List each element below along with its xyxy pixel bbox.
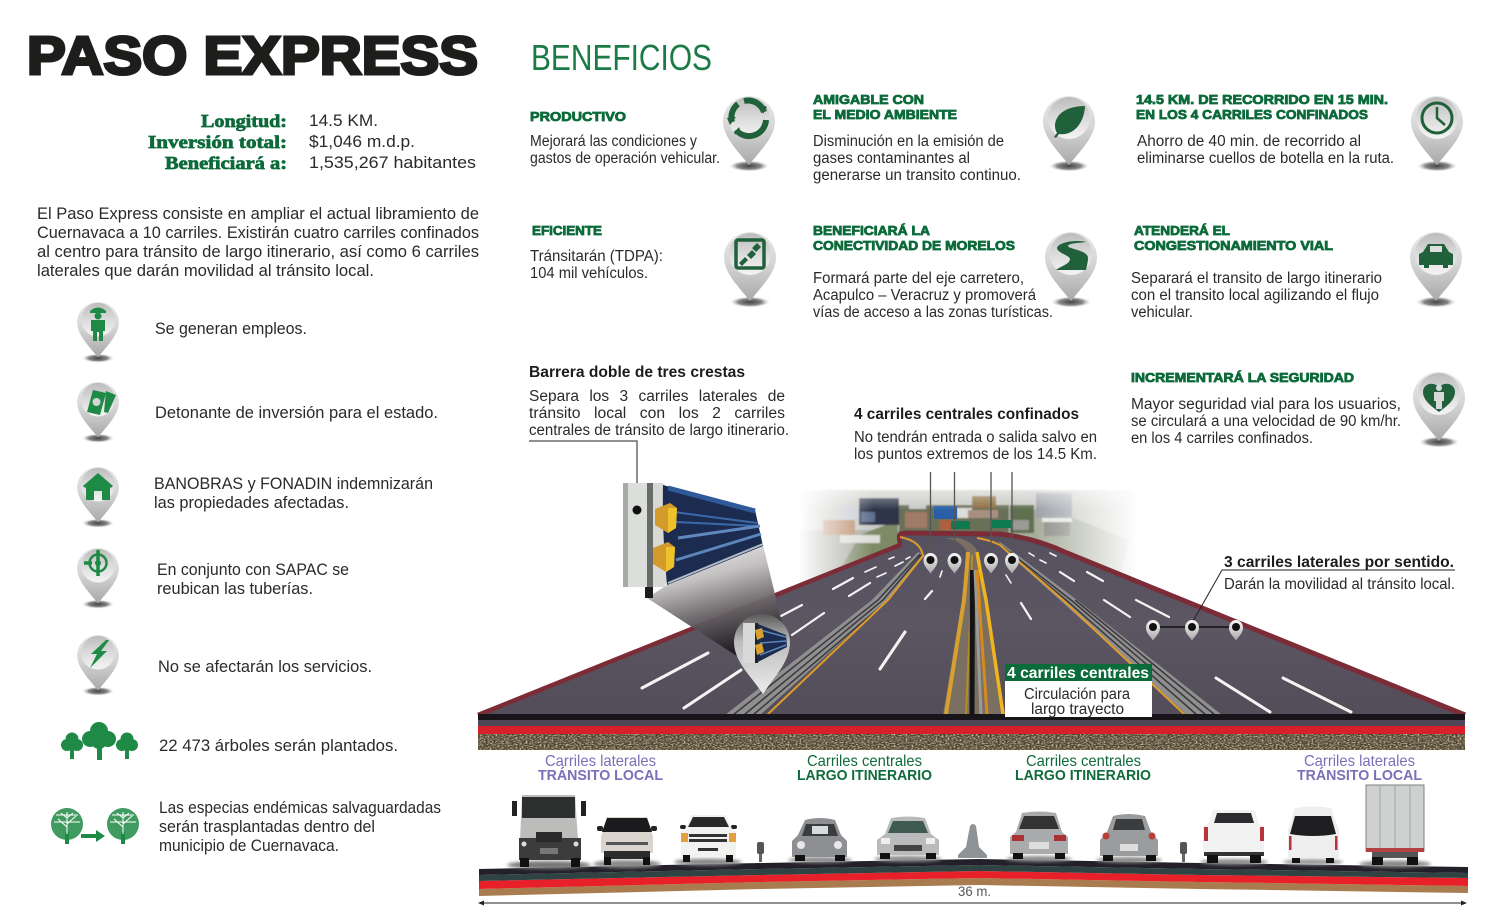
- benefit: conectividad: Acapulco – Veracruz y promoverá: [813, 287, 1036, 304]
- benefit: productivo: Mejorará las condiciones y: [530, 133, 697, 150]
- benefit: seguridad: INCREMENTARÁ LA SEGURIDAD: [1131, 370, 1354, 385]
- divider post: right: [1180, 842, 1187, 862]
- benefit: congestionamiento: vehicular.: [1131, 304, 1193, 321]
- list item: empleos: Se generan empleos.: [155, 320, 307, 338]
- intro paragraph: [37, 205, 479, 280]
- label: carriles centrales: Circulación para: [1024, 686, 1130, 703]
- benefit: recorrido: EN LOS 4 CARRILES CONFINADOS: [1136, 107, 1368, 122]
- benefit: congestionamiento: Separará el transito de largo itinerario: [1131, 270, 1382, 287]
- annotation: carriles confinados: No tendrán entrada o salida salvo en: [854, 429, 1097, 446]
- list item: tuberias: [77, 548, 349, 609]
- annotation: barrera doble: tránsito local con los 2 carriles: [529, 405, 785, 422]
- benefit: eficiente: [530, 223, 776, 308]
- benefit: congestionamiento: ATENDERÁ EL: [1134, 223, 1230, 238]
- benefit: congestionamiento: [1131, 223, 1462, 321]
- section label: laterales izquierda: Carriles laterales: [545, 753, 656, 770]
- width dimension: 36 m.: [958, 884, 991, 899]
- benefit: medio ambiente: generarse un transito continuo.: [813, 167, 1021, 184]
- section label: centrales derecha: Carriles centrales: [1026, 753, 1141, 770]
- intro paragraph: al centro para tránsito de largo itinerario, así como 6 carriles: [37, 243, 479, 261]
- section label: laterales izquierda: TRÁNSITO LOCAL: [538, 767, 663, 784]
- vehicle: compact car rear: [1096, 814, 1162, 863]
- label: carriles centrales: largo trayecto: [1031, 701, 1124, 718]
- list item: servicios: No se afectarán los servicios.: [158, 658, 372, 676]
- road perspective: [478, 533, 1465, 715]
- list item: inversion: Detonante de inversión para el estado.: [155, 404, 438, 422]
- section label: centrales derecha: LARGO ITINERARIO: [1015, 767, 1151, 784]
- benefit: medio ambiente: [813, 92, 1095, 184]
- benefit: productivo: [530, 96, 775, 172]
- pin: barrier on road: [734, 614, 790, 694]
- list item: trasplante: [51, 799, 441, 855]
- section label: laterales izquierda: [538, 753, 663, 784]
- section label: centrales izquierda: Carriles centrales: [807, 753, 922, 770]
- benefit: medio ambiente: EL MEDIO AMBIENTE: [813, 107, 957, 122]
- annotation: carriles laterales: 3 carriles laterales por sentido.: [1224, 554, 1454, 571]
- key figures: $1,046 m.d.p.: [309, 133, 415, 151]
- benefit: medio ambiente: Disminución en la emisión de: [813, 133, 1004, 150]
- benefit: conectividad: [813, 223, 1097, 321]
- key figures: Beneficiará a:: [165, 153, 287, 173]
- list item: arboles: [61, 722, 398, 760]
- list item: empleos: [77, 302, 307, 363]
- vehicle: pickup rear: [1200, 810, 1268, 865]
- benefit: recorrido: eliminarse cuellos de botella en la ruta.: [1137, 150, 1394, 167]
- intro paragraph: laterales que darán movilidad al tránsito local.: [37, 262, 374, 280]
- section label: laterales derecha: [1297, 753, 1422, 784]
- section label: centrales izquierda: LARGO ITINERARIO: [797, 767, 932, 784]
- label: carriles centrales: 4 carriles centrales: [1007, 665, 1149, 682]
- central median: [943, 538, 1005, 714]
- annotation: carriles confinados: los puntos extremos de los 14.5 Km.: [854, 446, 1097, 463]
- vehicle: van front: [593, 817, 661, 868]
- vehicle: sedan front: [874, 816, 942, 862]
- annotation: carriles confinados: [854, 406, 1097, 463]
- key figures: [148, 111, 476, 173]
- title: PASO EXPRESS: [27, 26, 478, 86]
- central barrier: [958, 824, 987, 858]
- road cross-section: [479, 859, 1468, 896]
- vehicle: compact car front: [788, 818, 852, 863]
- orange edge lines: [767, 537, 923, 715]
- annotation: barrera doble: [529, 364, 789, 439]
- list item: trasplante: Las especias endémicas salvaguardadas: [159, 799, 441, 817]
- lane dashes: [642, 553, 1351, 712]
- pins: lateral lanes: [1146, 570, 1455, 640]
- benefit: recorrido: [1136, 92, 1463, 172]
- list item: indemnizacion: las propiedades afectadas.: [154, 494, 349, 512]
- annotation: barrera doble: Separa los 3 carriles laterales de: [529, 388, 785, 405]
- annotation: barrera doble: centrales de tránsito de largo itinerario.: [529, 422, 789, 439]
- vehicle: pickup front: [674, 815, 742, 866]
- key figures: 1,535,267 habitantes: [309, 154, 476, 172]
- width dimension: [478, 884, 1467, 906]
- list item: inversion: [77, 382, 438, 443]
- section label: laterales derecha: Carriles laterales: [1304, 753, 1415, 770]
- benefit: medio ambiente: AMIGABLE CON: [813, 92, 924, 107]
- key figures: 14.5 KM.: [309, 112, 378, 130]
- vehicle: truck front: [507, 795, 591, 869]
- benefit: congestionamiento: CONGESTIONAMIENTO VIAL: [1134, 238, 1333, 253]
- annotation: carriles confinados: 4 carriles centrales confinados: [854, 406, 1079, 423]
- heading: beneficios: BENEFICIOS: [531, 37, 712, 78]
- pins: central lanes: [924, 472, 1019, 574]
- benefit: recorrido: 14.5 KM. DE RECORRIDO EN 15 MIN.: [1136, 92, 1388, 107]
- list item: trasplante: municipio de Cuernavaca.: [159, 837, 339, 855]
- list item: trasplante: serán trasplantadas dentro del: [159, 818, 375, 836]
- list item: indemnizacion: BANOBRAS y FONADIN indemnizarán: [154, 475, 433, 493]
- benefit: eficiente: EFICIENTE: [532, 223, 602, 238]
- benefit: seguridad: [1131, 370, 1465, 448]
- benefit: congestionamiento: con el transito local agilizando el flujo: [1131, 287, 1379, 304]
- section label: laterales derecha: TRÁNSITO LOCAL: [1297, 767, 1422, 784]
- list item: tuberias: reubican las tuberías.: [157, 580, 313, 598]
- benefit: medio ambiente: gases contaminantes al: [813, 150, 970, 167]
- vehicle: truck rear: [1359, 785, 1431, 868]
- benefit: productivo: PRODUCTIVO: [530, 109, 626, 124]
- city background: [798, 470, 1143, 596]
- annotation: carriles laterales: Darán la movilidad al tránsito local.: [1224, 576, 1455, 593]
- list item: indemnizacion: [77, 467, 433, 528]
- callout: barrier detail: [529, 441, 790, 694]
- benefit: seguridad: Mayor seguridad vial para los usuarios,: [1131, 396, 1401, 413]
- road cross layers: [478, 714, 1465, 750]
- benefit: seguridad: en los 4 carriles confinados.: [1131, 430, 1313, 447]
- label: carriles centrales: [1005, 664, 1152, 718]
- benefit: conectividad: Formará parte del eje carretero,: [813, 270, 1024, 287]
- benefit: conectividad: CONECTIVIDAD DE MORELOS: [813, 238, 1015, 253]
- key figures: Longitud:: [201, 111, 287, 131]
- benefit: eficiente: 104 mil vehículos.: [530, 265, 648, 282]
- vehicle: sedan rear: [1006, 812, 1072, 862]
- section label: centrales derecha: [1015, 753, 1151, 784]
- annotation: carriles laterales: [1224, 554, 1455, 593]
- key figures: Inversión total:: [148, 132, 287, 152]
- lateral barriers: [725, 552, 925, 715]
- list item: servicios: [77, 635, 372, 696]
- annotation: barrera doble: Barrera doble de tres crestas: [529, 364, 745, 381]
- intro paragraph: Cuernavaca a 10 carriles. Existirán cuatro carriles confinados: [37, 224, 479, 242]
- benefit: recorrido: Ahorro de 40 min. de recorrido al: [1137, 133, 1361, 150]
- benefit: seguridad: se circulará a una velocidad de 90 km/hr.: [1131, 413, 1401, 430]
- section label: centrales izquierda: [797, 753, 932, 784]
- intro paragraph: El Paso Express consiste en ampliar el actual libramiento de: [37, 205, 479, 223]
- vehicle: van rear: [1283, 806, 1343, 865]
- benefit: conectividad: vías de acceso a las zonas turísticas.: [813, 304, 1053, 321]
- list item: tuberias: En conjunto con SAPAC se: [157, 561, 349, 579]
- benefit: conectividad: BENEFICIARÁ LA: [813, 223, 931, 238]
- benefit: eficiente: Tránsitarán (TDPA):: [530, 248, 663, 265]
- list item: arboles: 22 473 árboles serán plantados.: [159, 737, 398, 755]
- divider post: left: [757, 842, 764, 862]
- benefit: productivo: gastos de operación vehicular.: [530, 150, 720, 167]
